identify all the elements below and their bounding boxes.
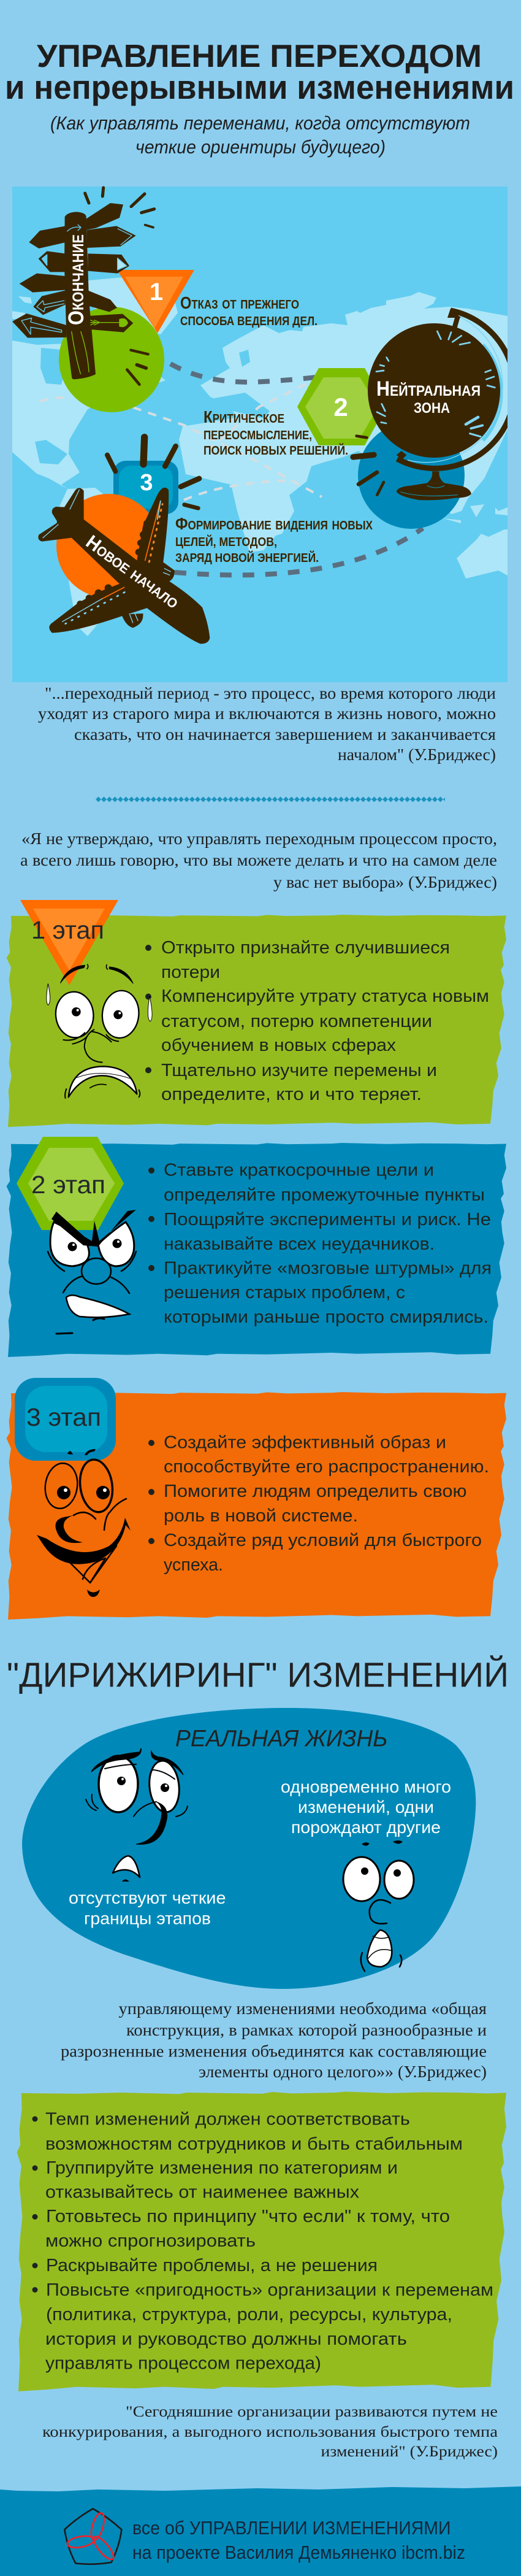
caption: stage 3: Формирование видения новых (175, 514, 373, 533)
stage 3 rounded square marker: 3 (140, 470, 153, 496)
title: и непрерывными изменениями (5, 68, 514, 106)
quote: general construction: управляющему изменениями необходима «общая (119, 1999, 487, 2018)
heading: 1 этап: 1 этап (31, 916, 104, 944)
panel: real life blob (22, 1708, 476, 1989)
bullet list: stage 2: Ставьте краткосрочные цели и (164, 1161, 434, 1180)
subtitle: четкие ориентиры будущего) (135, 136, 386, 158)
text: no clear boundaries: границы этапов (84, 1909, 211, 1928)
bullet list: stage 2: определяйте промежуточные пункты (164, 1185, 485, 1205)
caption: stage 2 (203, 407, 348, 458)
bullet list: stage 1: статусом, потерю компетенции (161, 1012, 432, 1031)
world map land (12, 277, 508, 636)
quote: general construction: конструкция, в рамках которой разнообразные и (126, 2021, 487, 2039)
label: Нейтральная зона (376, 377, 481, 418)
bullet list: stage 3: роль в новой системе. (164, 1506, 358, 1526)
bullet list: recommendations: Темп изменений должен соответствовать (45, 2109, 410, 2129)
bullet list: stage 3: Помогите людям определить свою (164, 1482, 467, 1501)
quote: today's organizations: "Сегодняшние организации развиваются путем не (126, 2404, 498, 2420)
bullet list: stage 2: решения старых проблем, с (164, 1283, 405, 1302)
stage 2 hexagon marker: 2 (333, 393, 348, 421)
quote: general construction: элементы одного целого»» (У.Бриджес) (199, 2063, 487, 2081)
bullet list: stage 1: Тщательно изучите перемены и (161, 1061, 437, 1080)
bullet list: stage 3: успеха. (164, 1555, 223, 1575)
caption: stage 3 (175, 514, 373, 566)
orange circle (56, 494, 161, 598)
panel: recommendations (17, 2091, 506, 2391)
bullet list: recommendations: (политика, структура, роли, ресурсы, культура, (46, 2305, 452, 2324)
badge: stage 2 hexagon (17, 1137, 124, 1230)
face: worried (86, 1748, 188, 1882)
green circle (59, 307, 164, 412)
label: Окончание: Окончание (64, 234, 88, 325)
bullet list: stage 1: Открыто признайте случившиеся (161, 938, 450, 958)
caption: stage 2: Критическое (203, 407, 284, 426)
quote: what you can do: «Я не утверждаю, что управлять переходным процессом просто, (21, 829, 497, 848)
quote: what you can do (20, 829, 497, 891)
quote: today's organizations: изменений" (У.Бриджес) (321, 2443, 498, 2460)
bullet list: recommendations: возможностям сотрудников и быть стабильным (45, 2134, 463, 2154)
caption: stage 1 (180, 293, 318, 329)
bullet list: stage 2: которыми раньше просто смирялись. (164, 1307, 489, 1327)
stage 3 rounded square marker (113, 461, 178, 514)
text: no clear boundaries: отсутствуют четкие (69, 1888, 226, 1907)
bullet list: stage 2: наказывайте всех неудачников. (164, 1234, 435, 1254)
title: УПРАВЛЕНИЕ ПЕРЕХОДОМ (37, 39, 482, 74)
quote: transition period: началом" (У.Бриджес) (338, 745, 496, 764)
bullet list: recommendations (32, 2109, 493, 2373)
caption: stage 3: заряд новой энергией. (175, 547, 319, 566)
bullet list: stage 2 (148, 1161, 492, 1327)
footer text: на проекте Василия Демьяненко ibcm.biz (132, 2542, 465, 2563)
text: many changes: изменений, одни (298, 1797, 434, 1817)
footer band (0, 2486, 521, 2576)
rays (107, 437, 199, 508)
blue circle (358, 422, 465, 529)
bullet list: recommendations: Раскрывайте проблемы, а не решения (46, 2256, 378, 2275)
caption: stage 3: целей, методов, (175, 531, 277, 550)
subtitle: (Как управлять переменами, когда отсутствуют (50, 112, 470, 134)
bullet list: recommendations: Готовьтесь по принципу "что если" к тому, что (46, 2207, 450, 2226)
heading: 3 этап: 3 этап (26, 1403, 101, 1431)
badge: stage 1 triangle (20, 900, 118, 985)
heading: 2 этап: 2 этап (31, 1171, 105, 1199)
bullet list: stage 1: Компенсируйте утрату статуса новым (161, 986, 489, 1006)
heading: conducting changes: "ДИРИЖИРИНГ" ИЗМЕНЕНИЙ (7, 1655, 509, 1694)
caption: stage 2: поиск новых решений. (203, 439, 348, 458)
quote: transition period: уходят из старого мира и включаются в жизнь нового, можно (38, 704, 496, 723)
face: angry (48, 1210, 136, 1334)
text: no clear boundaries (69, 1888, 226, 1928)
panel: stage 1 (7, 900, 506, 1127)
bullet list: stage 1: определите, кто и что теряет. (161, 1085, 422, 1104)
bullet list: stage 1: потери (161, 963, 220, 982)
badge: stage 3 rounded square (15, 1378, 116, 1461)
footer text (132, 2517, 465, 2563)
icon: logo (64, 2509, 121, 2564)
quote: today's organizations: конкурирования, а выгодного использования быстрого темпа (42, 2424, 498, 2440)
face: scared (47, 964, 152, 1098)
bullet list: recommendations: Группируйте изменения по категориям и (46, 2158, 398, 2178)
icon: signpost (12, 188, 154, 385)
bullet list: stage 2: Поощряйте эксперименты и риск. Не (164, 1210, 491, 1229)
quote: what you can do: у вас нет выбора» (У.Бриджес) (273, 873, 497, 891)
footer text: все об УПРАВЛЕНИИ ИЗМЕНЕНИЯМИ (132, 2517, 451, 2539)
text: many changes (281, 1777, 451, 1837)
bullet list: stage 3 (148, 1433, 489, 1575)
icon: globe (353, 309, 515, 500)
heading: real life: РЕАЛЬНАЯ ЖИЗНЬ (175, 1726, 387, 1752)
label: Нейтральная зона: зона (414, 394, 450, 418)
panel: stage 3 (7, 1378, 506, 1620)
bullet list: stage 3: Создайте эффективный образ и (164, 1433, 446, 1453)
text: many changes: порождают другие (291, 1818, 441, 1837)
diamond divider (96, 796, 445, 802)
quote: general construction (61, 1999, 487, 2081)
route dashes light (40, 384, 322, 500)
face: happy (37, 1449, 131, 1597)
bullet list: stage 3: Создайте ряд условий для быстрого (164, 1531, 482, 1550)
caption: stage 1: способа ведения дел. (180, 310, 318, 329)
bullet list: stage 2: Практикуйте «мозговые штурмы» для (164, 1259, 492, 1278)
stage 2 hexagon marker (297, 368, 386, 445)
bullet list: recommendations: управлять процессом перехода) (45, 2353, 321, 2373)
label: Нейтральная зона: Нейтральная (376, 377, 481, 401)
bullet list: stage 1 (145, 938, 489, 1104)
bullet list: stage 1: обучением в новых сферах (161, 1036, 397, 1055)
bullet list: recommendations: Повысьте «пригодность» организации к переменам (46, 2280, 493, 2300)
stage 1 triangle marker (117, 270, 194, 333)
panel: stage 2 (7, 1137, 506, 1357)
caption: stage 2: переосмысление, (203, 424, 312, 443)
stage 1 triangle marker: 1 (150, 279, 163, 306)
bullet list: recommendations: история и руководство должны помогать (45, 2329, 407, 2349)
panel: transition map (12, 186, 515, 682)
label: Новое начало: Новое начало (82, 531, 183, 613)
caption: stage 1: Отказ от прежнего (180, 293, 299, 312)
quote: transition period: "...переходный период - это процесс, во время которого люди (45, 684, 496, 702)
bullet list: recommendations: отказывайтесь от наименее важных (45, 2183, 360, 2202)
quote: general construction: разрозненные изменения объединятся как составляющие (61, 2042, 487, 2060)
quote: transition period (38, 684, 496, 764)
bullet list: stage 3: способствуйте его распространению. (164, 1457, 489, 1477)
route dashes dark (170, 364, 423, 575)
quote: transition period: сказать, что он начинается завершением и заканчивается (74, 725, 496, 744)
text: many changes: одновременно много (281, 1777, 451, 1796)
quote: today's organizations (42, 2404, 498, 2460)
icon: airplane (38, 488, 210, 644)
subtitle (50, 112, 470, 158)
quote: what you can do: а всего лишь говорю, что вы можете делать и что на самом деле (20, 851, 497, 869)
face: surprised (343, 1840, 414, 1971)
bullet list: recommendations: можно спрогнозировать (45, 2231, 256, 2251)
title (5, 39, 514, 106)
